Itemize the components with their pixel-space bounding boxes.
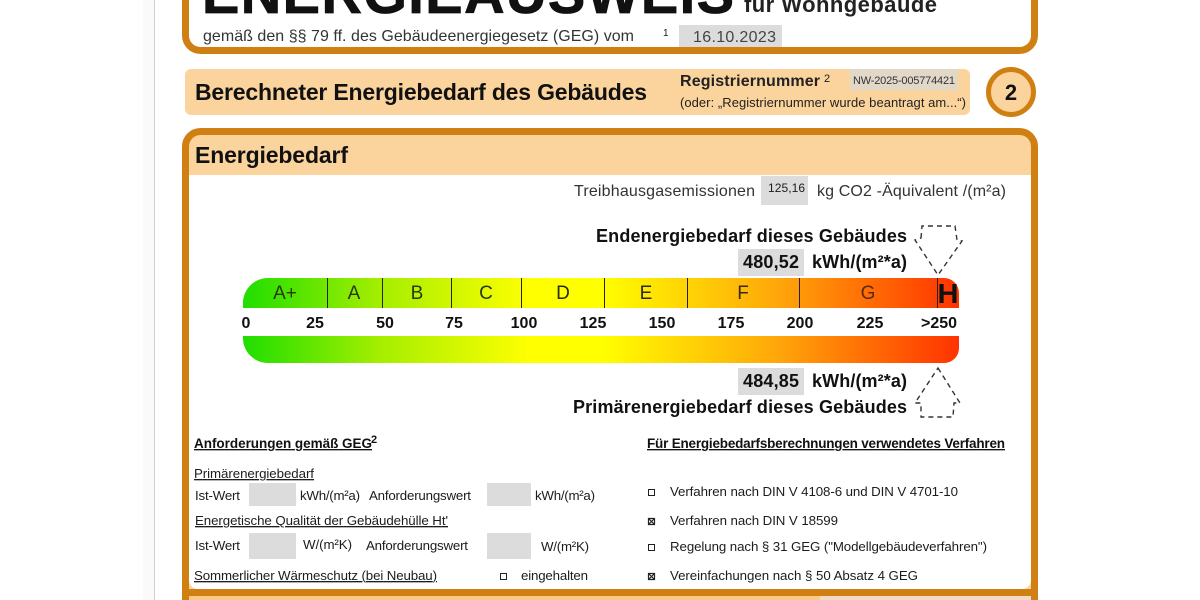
panel: energy demand	[186, 132, 1034, 600]
block: requirements under GEG: Anforderungswert	[366, 538, 468, 553]
row: greenhouse gas emissions: Treibhausgasemissionen	[574, 183, 755, 200]
block: requirements under GEG: kWh/(m²a)	[300, 488, 360, 503]
chart: energy scale, top bar: D	[556, 283, 570, 304]
row: greenhouse gas emissions	[574, 176, 1006, 205]
label: primary energy demand: Primärenergiebedarf dieses Gebäudes	[573, 397, 907, 417]
row: greenhouse gas emissions: kg CO2 -Äquivalent /(m²a)	[817, 182, 1006, 200]
panel: section heading bar	[185, 69, 970, 115]
chart: scale axis numbers: 25	[306, 315, 324, 332]
heading: calculated energy demand: Berechneter Energiebedarf des Gebäudes	[195, 79, 647, 105]
label: registration number: Registriernummer	[680, 73, 820, 90]
chart: energy scale, top bar: G	[861, 283, 875, 304]
value: primary energy demand: 484,85	[743, 371, 799, 391]
chart: energy scale, top bar: A	[348, 283, 361, 304]
block: requirements under GEG: W/(m²K)	[303, 537, 352, 552]
arrow: final energy marker	[915, 226, 962, 275]
chart: scale axis numbers: 100	[511, 315, 537, 332]
chart: energy scale, top bar: C	[479, 283, 493, 304]
value: final energy demand: 480,52	[743, 252, 799, 272]
note: registration hint: (oder: „Registriernummer wurde beantragt am...“)	[680, 95, 966, 110]
block: calculation method: Regelung nach § 31 GEG ("Modellgebäudeverfahren")	[670, 539, 987, 554]
block: requirements under GEG: eingehalten	[521, 568, 588, 583]
footnote marker 2: 2	[824, 73, 830, 85]
value: final energy demand	[738, 249, 907, 276]
chart: scale axis numbers: 225	[857, 315, 883, 332]
badge: page number 2: 2	[1005, 80, 1017, 105]
row: greenhouse gas emissions: 125,16	[768, 181, 805, 195]
chart: scale axis numbers: 125	[580, 315, 606, 332]
block: requirements under GEG: Ist-Wert	[195, 488, 240, 503]
field: registration number: NW-2025-005774421	[853, 75, 955, 87]
chart: energy scale, top bar: E	[640, 283, 652, 304]
chart: scale axis numbers	[242, 315, 957, 332]
chart: scale axis numbers: 75	[445, 315, 463, 332]
field: registration number	[850, 69, 958, 90]
block: requirements under GEG: 2	[371, 434, 377, 446]
block: calculation method: Verfahren nach DIN V 4108-6 und DIN V 4701-10	[670, 484, 958, 499]
block: calculation method	[647, 436, 1005, 583]
chart: scale axis numbers: 200	[787, 315, 813, 332]
chart: scale axis numbers: >250	[921, 315, 957, 332]
value: primary energy demand: kWh/(m²*a)	[812, 371, 907, 391]
panel: certificate title frame	[186, 0, 1034, 50]
field: date: 16.10.2023	[693, 29, 776, 46]
block: calculation method: Für Energiebedarfsberechnungen verwendetes Verfahren	[647, 436, 1005, 451]
block: requirements under GEG: Sommerlicher Wärmeschutz (bei Neubau)	[194, 568, 437, 583]
label: final energy demand: Endenergiebedarf dieses Gebäudes	[596, 226, 907, 246]
block: requirements under GEG: Anforderungswert	[369, 488, 471, 503]
chart: energy scale, top bar: H	[938, 278, 958, 309]
chart: energy scale, bottom bar	[243, 336, 959, 363]
chart: energy scale, top bar	[243, 278, 959, 309]
block: requirements under GEG: Energetische Qualität der Gebäudehülle Ht'	[195, 513, 448, 528]
block: requirements under GEG: W/(m²K)	[541, 539, 589, 554]
chart: scale axis numbers: 0	[242, 315, 251, 332]
block: calculation method: Vereinfachungen nach § 50 Absatz 4 GEG	[670, 568, 918, 583]
chart: scale axis numbers: 50	[376, 315, 394, 332]
chart: energy scale, top bar: F	[737, 283, 749, 304]
block: requirements under GEG	[194, 434, 595, 583]
chart: energy scale, top bar: B	[411, 283, 423, 304]
chart: scale axis numbers: 175	[718, 315, 744, 332]
value: primary energy demand	[738, 368, 907, 395]
arrow: primary energy marker	[915, 368, 960, 417]
value: final energy demand: kWh/(m²*a)	[812, 252, 907, 272]
chart: energy scale, top bar: A+	[273, 283, 297, 304]
block: requirements under GEG: Ist-Wert	[195, 538, 240, 553]
text: legal basis: gemäß den §§ 79 ff. des Gebäudeenergiegesetz (GEG) vom	[203, 28, 634, 45]
footnote marker 1: 1	[663, 28, 669, 39]
badge: page number 2	[988, 70, 1034, 114]
block: calculation method: Verfahren nach DIN V 18599	[670, 513, 838, 528]
block: requirements under GEG: Primärenergiebedarf	[194, 466, 314, 481]
block: requirements under GEG: kWh/(m²a)	[535, 488, 595, 503]
chart: scale axis numbers: 150	[649, 315, 675, 332]
heading: energy demand: Energiebedarf	[195, 142, 348, 168]
field: date	[679, 25, 782, 47]
block: requirements under GEG: Anforderungen gemäß GEG	[194, 436, 372, 451]
